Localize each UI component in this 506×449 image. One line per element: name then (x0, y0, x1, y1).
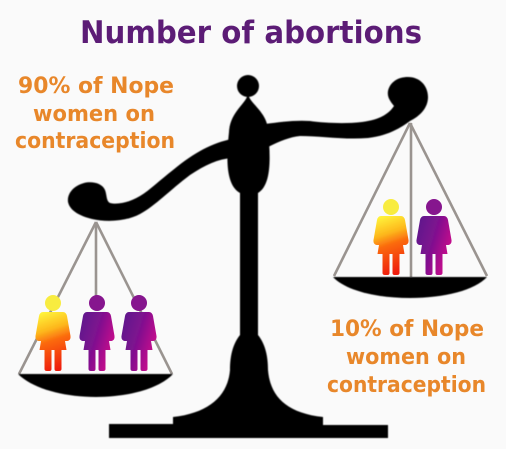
left beam (68, 139, 232, 221)
icon: woman purple, left middle (79, 295, 115, 371)
icon: woman purple, left right (121, 295, 157, 371)
balance scale stand and beam (68, 75, 428, 438)
text: right caption: women on (346, 345, 466, 370)
pan dish (18, 374, 173, 397)
right pan (333, 123, 487, 298)
central body (227, 94, 270, 193)
text: left caption: contraception (15, 129, 175, 154)
pan strings (19, 222, 172, 374)
column and base (109, 190, 388, 438)
left pan (18, 222, 173, 397)
icon: woman yellow-red, right (373, 199, 409, 275)
finial (237, 75, 259, 97)
text: left caption: 90% of Nope (18, 74, 174, 99)
title: Number of abortions (80, 15, 422, 51)
icon: woman yellow-red, left (35, 295, 71, 371)
text: left caption: women on (33, 102, 155, 127)
pan strings (334, 123, 487, 277)
right beam (265, 77, 428, 147)
text: right caption (327, 317, 486, 398)
text: right caption: contraception (327, 373, 486, 398)
icon: woman purple, right (416, 199, 452, 275)
pan dish (333, 277, 487, 298)
text: right caption: 10% of Nope (330, 317, 484, 342)
text: left caption (15, 74, 175, 154)
